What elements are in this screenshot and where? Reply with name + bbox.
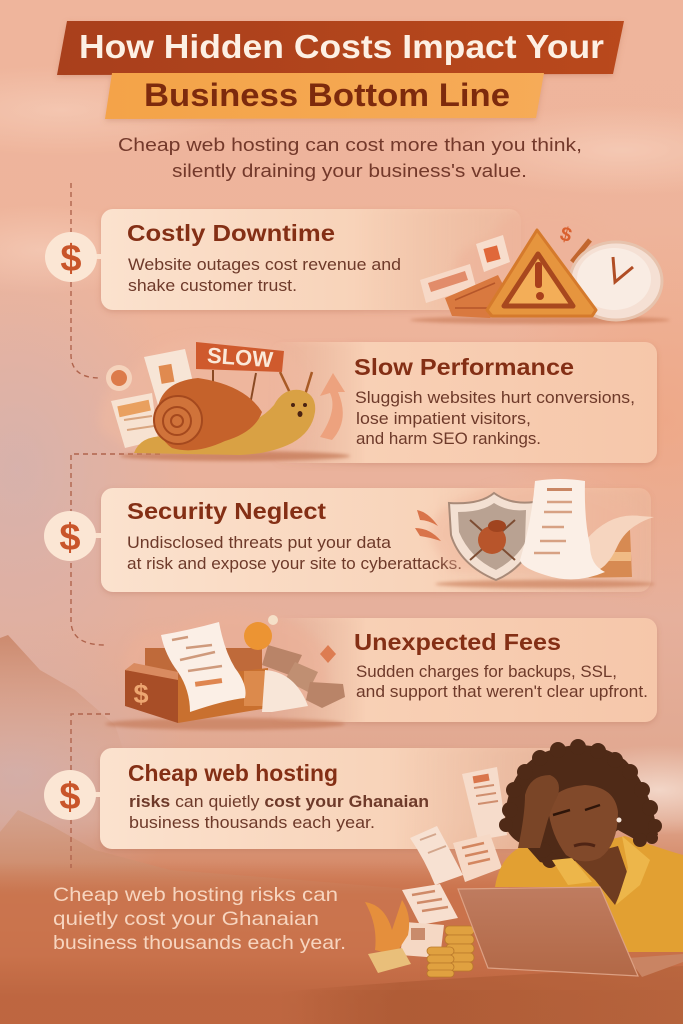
text: security description: Undisclosed threats put your data	[127, 534, 392, 552]
illustration: warning sign and clock: $	[558, 223, 574, 247]
text: performance description	[355, 389, 635, 448]
neck	[572, 846, 628, 905]
panel: Costly Downtime	[101, 209, 521, 310]
hair	[499, 739, 662, 868]
text: hosting description	[129, 793, 429, 832]
icon: dollar badge 1: $	[60, 238, 82, 280]
note	[368, 948, 411, 973]
text: downtime description: shake customer trust.	[128, 277, 297, 295]
text: performance description: lose impatient visitors,	[356, 410, 531, 428]
illustration: worried woman at laptop	[280, 739, 683, 1024]
text: performance description: and harm SEO rankings.	[356, 430, 541, 448]
illustration: snail with slow sign	[99, 338, 350, 461]
title line 2: Business Bottom Line	[144, 77, 510, 113]
illustration: cash box and receipts	[105, 612, 345, 730]
coins	[427, 926, 474, 977]
text: security description	[127, 534, 462, 573]
earring	[616, 818, 622, 822]
icon: orange badge	[106, 365, 132, 391]
illustration: shield, bug and receipt	[415, 479, 655, 588]
text: fees description: Sudden charges for backups, SSL,	[356, 663, 617, 681]
illustration: cash box and receipts: $	[133, 679, 149, 709]
heading: Security Neglect: Security Neglect	[127, 498, 326, 524]
text: performance description: Sluggish websites hurt conversions,	[355, 389, 635, 407]
heading: Slow Performance: Slow Performance	[354, 354, 574, 380]
title banner	[57, 21, 624, 119]
panel: Slow Performance	[270, 342, 657, 463]
laptop	[458, 887, 683, 977]
heading: Cheap web hosting: Cheap web hosting	[128, 760, 338, 786]
closing statement: quietly cost your Ghanaian	[53, 908, 319, 930]
panel: Cheap web hosting	[100, 748, 580, 849]
icon: dollar badge 2: $	[59, 517, 81, 559]
shirt	[495, 836, 683, 952]
text: hosting description: risks can quietly cost your Ghanaian	[129, 793, 429, 811]
sign: SLOW: SLOW	[206, 343, 274, 372]
panel: Unexpected Fees	[270, 618, 657, 722]
subtitle	[118, 134, 582, 181]
icon: dollar badge 3: $	[59, 776, 81, 818]
icon: dollar badge 3	[44, 770, 103, 820]
title line 1	[57, 21, 624, 75]
closing statement: business thousands each year.	[53, 932, 346, 954]
text: fees description: and support that weren't clear upfront.	[356, 683, 648, 701]
title line 1: How Hidden Costs Impact Your	[79, 28, 604, 65]
text: fees description	[356, 663, 648, 701]
table	[280, 966, 683, 1024]
flames	[365, 900, 409, 955]
subtitle: Cheap web hosting can cost more than you think,	[118, 134, 582, 155]
face	[548, 785, 618, 861]
text: security description: at risk and expose your site to cyberattacks.	[127, 555, 462, 573]
paperwork	[400, 767, 507, 958]
illustration: warning sign and clock	[410, 208, 670, 324]
subtitle: silently draining your business's value.	[172, 160, 527, 181]
arm and hand on head	[518, 775, 559, 848]
panel: Security Neglect	[101, 488, 651, 592]
text: downtime description: Website outages cost revenue and	[128, 256, 401, 274]
title line 2	[105, 73, 544, 119]
heading: Unexpected Fees: Unexpected Fees	[354, 629, 561, 655]
closing statement	[53, 884, 346, 954]
timeline: dashed connector	[71, 183, 160, 868]
heading: Costly Downtime: Costly Downtime	[127, 220, 335, 246]
text: hosting description: business thousands each year.	[129, 814, 375, 832]
text: downtime description	[128, 256, 401, 295]
closing statement: Cheap web hosting risks can	[53, 884, 338, 906]
collar	[616, 836, 650, 905]
icon: dollar badge 1	[45, 232, 104, 282]
icon: dollar badge 2	[44, 511, 103, 561]
